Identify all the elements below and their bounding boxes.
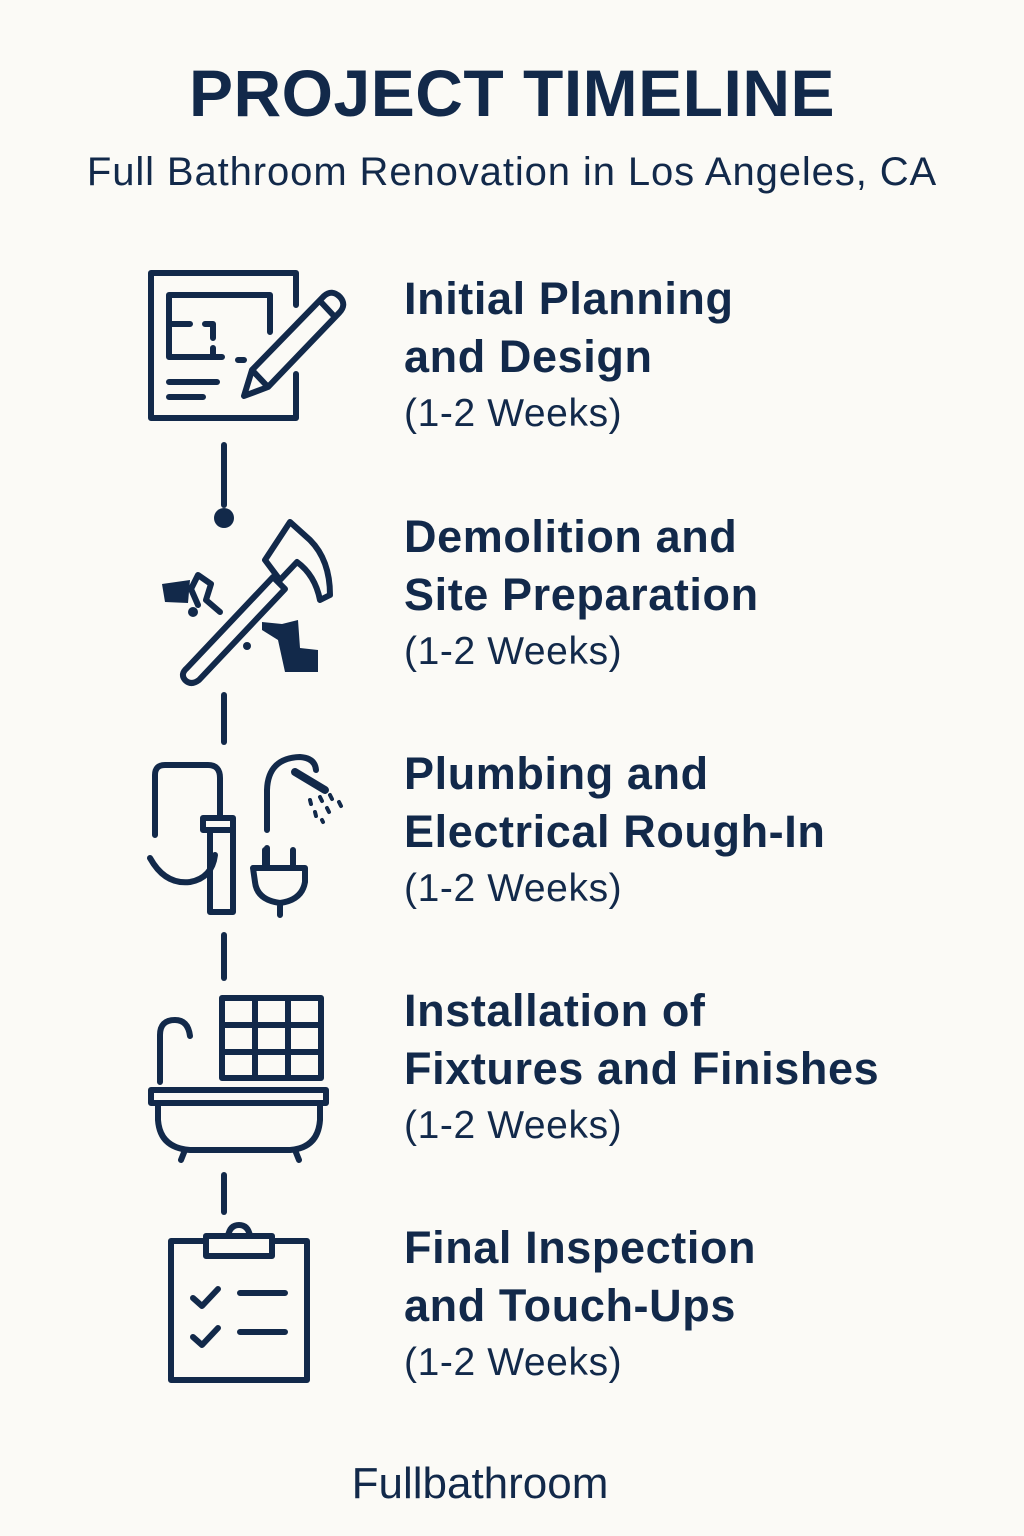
connector 4 — [221, 1175, 227, 1212]
step 2 text — [404, 511, 759, 673]
connector 1 — [214, 445, 234, 528]
step 2 text: Site Preparation — [404, 569, 759, 620]
footer brand: Fullbathroom — [352, 1459, 608, 1508]
step 1 text: and Design — [404, 331, 653, 382]
step 4 text — [404, 985, 879, 1147]
step 5 text: Final Inspection — [404, 1222, 756, 1273]
step 4 text: (1-2 Weeks) — [404, 1104, 622, 1147]
step 2 text: Demolition and — [404, 511, 737, 562]
subtitle: Full Bathroom Renovation in Los Angeles, CA — [87, 150, 937, 194]
step 1 text: (1-2 Weeks) — [404, 392, 622, 435]
icon: hammer with debris — [162, 522, 330, 683]
step 4 text: Installation of — [404, 985, 706, 1036]
icon: bathtub with tile — [151, 998, 326, 1160]
step 1 text: Initial Planning — [404, 273, 734, 324]
icon: blueprint with pencil — [151, 273, 343, 418]
step 3 text: Plumbing and — [404, 748, 709, 799]
step 4 text: Fixtures and Finishes — [404, 1043, 879, 1094]
step 5 text — [404, 1222, 756, 1384]
connector 2 — [221, 695, 227, 742]
icon: plumbing and electrical — [150, 757, 341, 915]
step 1 text — [404, 273, 734, 435]
step 3 text — [404, 748, 825, 910]
step 5 text: and Touch-Ups — [404, 1280, 736, 1331]
connector 3 — [221, 935, 227, 978]
icon: clipboard checklist — [171, 1225, 307, 1380]
title: PROJECT TIMELINE — [189, 56, 835, 130]
step 2 text: (1-2 Weeks) — [404, 630, 622, 673]
step 3 text: Electrical Rough-In — [404, 806, 825, 857]
step 5 text: (1-2 Weeks) — [404, 1341, 622, 1384]
step 3 text: (1-2 Weeks) — [404, 867, 622, 910]
